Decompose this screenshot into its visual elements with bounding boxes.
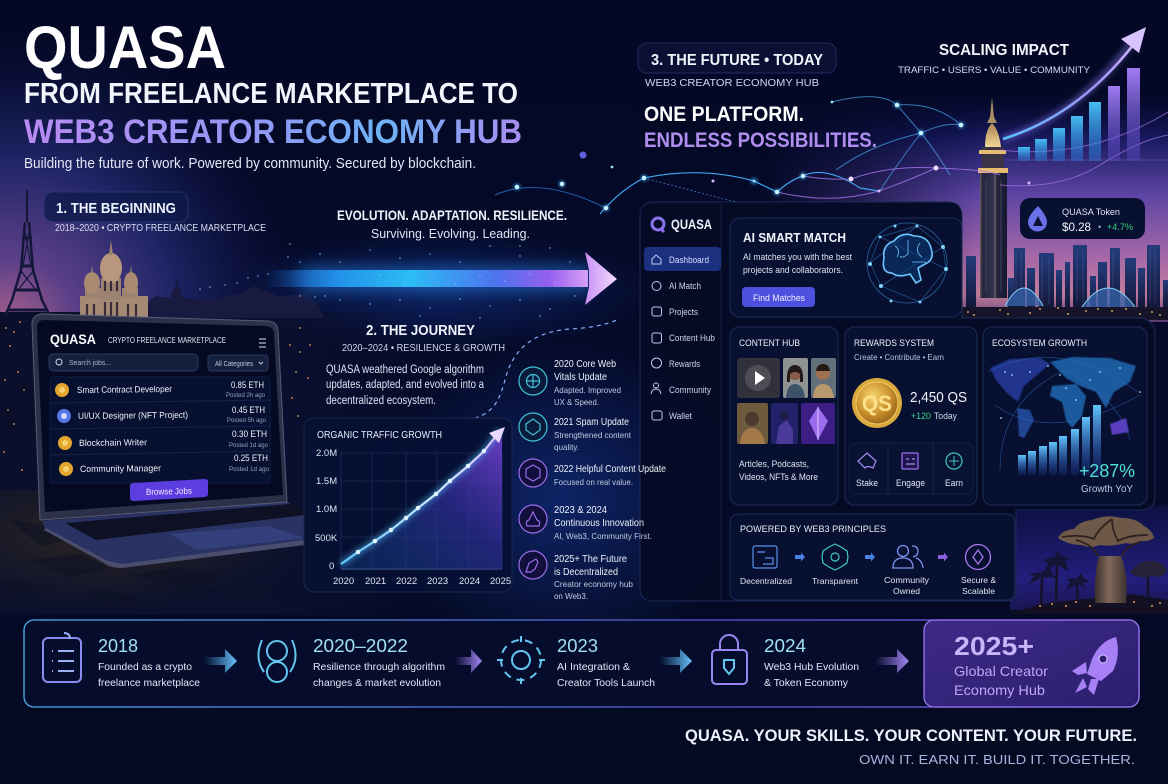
milestone: 2024 — [764, 636, 859, 689]
dashboard sidebar: AI Match — [669, 281, 701, 291]
section 3 heading — [638, 43, 877, 152]
panel: content hub: CONTENT HUB — [739, 338, 800, 349]
big arrow — [200, 244, 617, 318]
dashboard sidebar: Projects — [669, 307, 699, 317]
dashboard sidebar: Dashboard — [669, 255, 709, 265]
arrow — [455, 649, 482, 673]
chart: organic traffic growth: 1.5M — [316, 476, 337, 487]
token badge: • — [1098, 222, 1101, 232]
milestone: 2023: AI Integration & — [557, 661, 630, 673]
section 2 heading: 2020–2024 • RESILIENCE & GROWTH — [342, 342, 505, 354]
algorithm timeline: Vitals Update — [554, 372, 607, 383]
skyscraper tower — [978, 97, 1008, 298]
algorithm timeline: AI, Web3, Community First. — [554, 531, 652, 541]
algorithm timeline: quality. — [554, 442, 579, 452]
panel: rewards system: REWARDS SYSTEM — [854, 338, 934, 349]
panel: rewards system: Today — [934, 411, 957, 421]
scaling impact heading — [898, 42, 1091, 76]
milestone: 2023 — [557, 636, 655, 689]
algorithm timeline: 2022 Helpful Content Update — [554, 464, 666, 475]
panel: ecosystem growth: Growth YoY — [1081, 484, 1133, 495]
laptop header: QUASA — [50, 331, 96, 347]
icon: resilience person — [258, 640, 296, 682]
milestone: 2020-2022: 2020–2022 — [313, 636, 408, 656]
panel: content hub: Videos, NFTs & More — [739, 472, 818, 482]
chart: organic traffic growth: 2024 — [459, 576, 480, 587]
scaling bar chart — [1003, 27, 1146, 161]
icon: decentralized — [753, 546, 777, 568]
video thumbnail — [737, 358, 780, 398]
icon: rocket — [1072, 637, 1118, 695]
evolution statement: EVOLUTION. ADAPTATION. RESILIENCE. — [337, 207, 567, 223]
browse jobs button: Browse Jobs — [146, 486, 192, 497]
closing tagline: QUASA. YOUR SKILLS. YOUR CONTENT. YOUR FUTURE. — [685, 727, 1137, 745]
icon: AI brain network — [867, 223, 948, 304]
icon: basilica — [80, 240, 148, 318]
job list: 0.25 ETH — [234, 453, 268, 463]
icon: AI integration — [497, 636, 545, 684]
milestone: 2024: 2024 — [764, 636, 806, 656]
laptop — [32, 314, 305, 568]
panel: web3 principles: Scalable — [962, 586, 995, 596]
chart: organic traffic growth: 2020 — [333, 576, 354, 587]
algorithm timeline: Focused on real value. — [554, 477, 633, 487]
find matches button — [742, 287, 815, 307]
panel: web3 principles: POWERED BY WEB3 PRINCIPLES — [740, 524, 886, 534]
job list: UI/UX Designer (NFT Project) — [78, 410, 188, 421]
section 2 heading: 2. THE JOURNEY — [366, 322, 475, 339]
network lines — [495, 97, 1168, 214]
section 1 heading — [44, 192, 266, 234]
algorithm timeline: Strengthened content — [554, 430, 632, 440]
dashboard frame — [640, 202, 1155, 601]
title block: FROM FREELANCE MARKETPLACE TO — [24, 78, 518, 110]
icon: clipboard — [43, 633, 81, 682]
section 3 heading: ENDLESS POSSIBILITIES. — [644, 129, 877, 152]
panel: AI smart match — [730, 218, 962, 317]
search bar — [49, 354, 268, 371]
job list: Smart Contract Developer — [77, 384, 172, 395]
arrow — [875, 649, 909, 673]
milestone: 2018: freelance marketplace — [98, 677, 200, 689]
chart: organic traffic growth: 1.0M — [316, 504, 337, 515]
icon: QS coin — [852, 378, 902, 428]
milestone: 2023: 2023 — [557, 636, 598, 656]
active item — [644, 247, 721, 271]
job list: Community Manager — [80, 463, 161, 474]
panel: web3 principles — [730, 514, 1015, 600]
icon: core web vitals — [519, 367, 547, 395]
section 3 heading: ONE PLATFORM. — [644, 103, 804, 126]
panel: content hub: Articles, Podcasts, — [739, 459, 809, 469]
section 3 heading: 3. THE FUTURE • TODAY — [651, 52, 824, 69]
search bar: All Categories — [215, 361, 253, 368]
algorithm timeline: Creator economy hub — [554, 579, 633, 589]
chart: organic traffic growth — [304, 418, 512, 592]
milestone: 2020-2022: Resilience through algorithm — [313, 661, 445, 673]
panel: rewards system: 2,450 QS — [910, 389, 967, 406]
milestone: 2024: Web3 Hub Evolution — [764, 661, 859, 673]
milestone: 2024: & Token Economy — [764, 677, 849, 689]
token badge: $0.28 — [1062, 220, 1091, 234]
journey description — [326, 364, 485, 407]
panel: ecosystem growth: ECOSYSTEM GROWTH — [992, 338, 1087, 349]
section 2 heading — [342, 322, 505, 354]
algorithm timeline: 2020 Core Web — [554, 359, 616, 370]
chart: organic traffic growth: 0 — [329, 561, 334, 572]
panel: rewards system: Create • Contribute • Earn — [854, 353, 944, 362]
chart: organic traffic growth: 2.0M — [316, 448, 337, 459]
reward actions — [849, 443, 973, 494]
find matches button: Find Matches — [753, 293, 805, 303]
icon: padlock — [712, 635, 747, 684]
chart: organic traffic growth: 2021 — [365, 576, 386, 587]
job list: Posted 1d ago — [229, 442, 268, 449]
skyline right — [962, 245, 1168, 320]
browse jobs button — [130, 479, 208, 501]
panel: web3 principles: Community — [884, 575, 930, 585]
panel: AI smart match: projects and collaborators. — [743, 265, 843, 275]
journey description: decentralized ecosystem. — [326, 395, 436, 407]
evolution statement: Surviving. Evolving. Leading. — [371, 226, 530, 241]
token badge: QUASA Token — [1062, 207, 1120, 218]
icon: spam update — [519, 413, 547, 441]
job list: 0.30 ETH — [232, 429, 267, 439]
algorithm timeline: is Decentralized — [554, 567, 618, 578]
chart: organic traffic growth: 500K — [315, 533, 338, 544]
icon: community — [893, 546, 923, 568]
token badge — [1020, 198, 1145, 239]
job list: Posted 2h ago — [226, 392, 265, 399]
panel: web3 principles: Transparent — [812, 576, 859, 586]
journey description: QUASA weathered Google algorithm — [326, 364, 484, 376]
milestone: 2018 — [98, 636, 200, 689]
icon: decentralized future — [519, 551, 547, 579]
bottom timeline banner — [24, 620, 1139, 707]
closing tagline: OWN IT. EARN IT. BUILD IT. TOGETHER. — [859, 752, 1135, 767]
algorithm timeline: 2021 Spam Update — [554, 417, 629, 428]
panel: web3 principles: Decentralized — [740, 576, 792, 586]
scaling impact heading: SCALING IMPACT — [939, 42, 1070, 59]
section 1 heading: 2018–2020 • CRYPTO FREELANCE MARKETPLACE — [55, 223, 266, 234]
milestone: 2020-2022: changes & market evolution — [313, 677, 441, 689]
final milestone card — [924, 620, 1139, 707]
algorithm timeline: Adapted. Improved — [554, 385, 621, 395]
job list: Blockchain Writer — [79, 437, 147, 448]
search bar: Search jobs... — [69, 358, 111, 367]
token badge: +4.7% — [1107, 222, 1133, 232]
journey description: updates, adapted, and evolved into a — [326, 379, 485, 391]
icon: secure — [966, 544, 990, 570]
laptop header — [50, 331, 266, 347]
city lights — [4, 322, 310, 470]
icon: eiffel tower — [5, 190, 50, 316]
icon: transparent — [822, 544, 848, 570]
closing tagline — [685, 727, 1137, 767]
chart: organic traffic growth: ORGANIC TRAFFIC GROWTH — [317, 430, 442, 441]
title block: Building the future of work. Powered by community. Secured by blockchain. — [24, 156, 476, 172]
algorithm timeline: on Web3. — [554, 591, 588, 601]
growth bars — [1018, 405, 1101, 475]
icon: QS coin: QS — [862, 391, 892, 416]
job list: Posted 1d ago — [229, 466, 269, 473]
panel: ecosystem growth — [983, 327, 1147, 505]
dashed connector — [475, 320, 617, 418]
evolution statement — [337, 207, 567, 241]
creator thumbnails — [737, 358, 836, 444]
panel: AI smart match: AI SMART MATCH — [743, 230, 846, 245]
final milestone card: 2025+ — [954, 631, 1034, 661]
arrow — [660, 649, 692, 673]
scaling impact heading: TRAFFIC • USERS • VALUE • COMMUNITY — [898, 65, 1091, 76]
section 1 heading: 1. THE BEGINNING — [56, 200, 176, 217]
panel: rewards system: +120 — [911, 411, 931, 421]
icon: continuous innovation — [519, 505, 547, 533]
algorithm timeline: 2025+ The Future — [554, 554, 627, 565]
reward actions: Stake — [856, 478, 878, 488]
algorithm timeline: 2023 & 2024 — [554, 505, 607, 516]
baobab and palm trees — [1010, 516, 1168, 614]
panel: web3 principles: Owned — [893, 586, 920, 596]
laptop header: CRYPTO FREELANCE MARKETPLACE — [108, 336, 226, 345]
icon: helpful content — [519, 459, 547, 487]
arrow — [204, 649, 237, 673]
dashboard lower-right sky — [1010, 505, 1168, 610]
job list — [50, 377, 270, 483]
final milestone card: Economy Hub — [954, 682, 1045, 698]
panel: content hub — [730, 327, 838, 505]
dashboard sidebar: QUASA — [671, 216, 712, 232]
chart: organic traffic growth: 2023 — [427, 576, 448, 587]
chart: organic traffic growth: 2025 — [490, 576, 511, 587]
world map — [988, 357, 1140, 470]
milestone: 2018: 2018 — [98, 636, 138, 656]
dashboard sidebar — [644, 202, 721, 601]
title block: QUASA — [24, 14, 226, 81]
title block — [24, 14, 522, 172]
reward actions: Engage — [896, 478, 925, 488]
dashboard sidebar: Wallet — [669, 411, 693, 421]
milestone: 2023: Creator Tools Launch — [557, 677, 655, 689]
dashboard sidebar: Rewards — [669, 359, 701, 369]
job list: Posted 5h ago — [227, 417, 266, 424]
dashboard sidebar: Community — [669, 385, 712, 395]
icon: Q logo — [652, 218, 664, 232]
panel: ecosystem growth: +287% — [1079, 461, 1135, 481]
reward actions: Earn — [945, 478, 963, 488]
dashboard sidebar: Content Hub — [669, 333, 715, 343]
background night scene — [0, 50, 1168, 620]
milestone: 2020-2022 — [313, 636, 445, 689]
panel: AI smart match: AI matches you with the best — [743, 252, 852, 262]
panel: rewards system — [845, 327, 977, 505]
algorithm timeline: UX & Speed. — [554, 397, 599, 407]
left landmarks — [5, 190, 324, 318]
final milestone card: Global Creator — [954, 663, 1048, 679]
algorithm timeline — [519, 359, 666, 601]
title block: WEB3 CREATOR ECONOMY HUB — [24, 113, 522, 151]
section 3 heading: WEB3 CREATOR ECONOMY HUB — [645, 77, 819, 89]
job list: 0.85 ETH — [231, 380, 264, 390]
milestone: 2018: Founded as a crypto — [98, 661, 192, 673]
panel: web3 principles: Secure & — [961, 575, 996, 585]
algorithm timeline: Continuous Innovation — [554, 518, 644, 529]
chart: organic traffic growth: 2022 — [396, 576, 417, 587]
job list: 0.45 ETH — [232, 405, 265, 415]
